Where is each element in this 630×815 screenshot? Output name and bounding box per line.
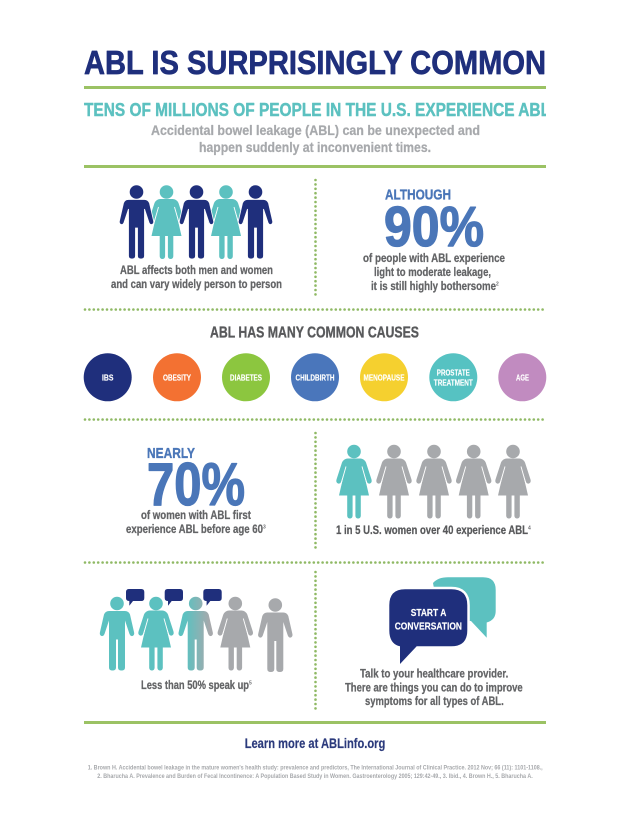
cause: age <box>498 353 546 401</box>
second green rule <box>84 165 546 168</box>
cause: IBS: IBS <box>102 372 114 382</box>
caption: talk to your provider <box>345 669 523 708</box>
cause: obesity <box>153 353 201 401</box>
caption: 90 percent: of people with ABL experience <box>363 253 505 265</box>
caption: talk to your provider: symptoms for all types of ABL. <box>365 696 504 708</box>
cause: IBS <box>84 353 132 401</box>
cause: diabetes <box>222 353 270 401</box>
cause: menopause: MENOPAUSE <box>364 372 405 382</box>
icon: row of men and women <box>119 185 273 259</box>
heading: causes: ABL HAS MANY COMMON CAUSES <box>210 324 419 342</box>
caption: men and women: and can vary widely person to person <box>111 279 282 291</box>
caption: talk to your provider: There are things you can do to improve <box>345 683 523 695</box>
icon: five women <box>336 445 531 518</box>
panel: start a conversation <box>345 577 523 708</box>
icon: speech bubbles: START A <box>411 608 446 619</box>
panel: speak up <box>100 589 293 692</box>
cause: diabetes: DIABETES <box>230 372 262 382</box>
subtitle: TENS OF MILLIONS OF PEOPLE IN THE U.S. EXPERIENCE ABL <box>84 99 550 120</box>
stat: 90%: 90% <box>384 195 484 259</box>
caption: 90 percent: 2 <box>496 282 499 288</box>
caption: speak up: Less than 50% speak up <box>141 680 249 692</box>
intro text: happen suddenly at inconvenient times. <box>199 140 431 155</box>
call to action: Learn more at ABLinfo.org <box>245 735 385 751</box>
cause: childbirth <box>291 353 339 401</box>
bottom green rule <box>84 721 546 724</box>
references <box>88 766 543 780</box>
cause: prostate treatment: PROSTATE <box>437 367 470 377</box>
caption: 1 in 5 women: 1 in 5 U.S. women over 40 experience ABL <box>336 525 528 537</box>
references: 2. Bharucha A. Prevalence and Burden of Fecal Incontinence: A Population Based Study in Women. Gastroenterology 2005; 129:42-49., 3. Ibid., 4. Brown H., 5. Bharucha A. <box>97 774 533 780</box>
caption: speak up: 5 <box>249 680 252 686</box>
cause: prostate treatment: TREATMENT <box>434 377 473 387</box>
label: nearly: NEARLY <box>147 446 195 462</box>
icon: five people with speech bubbles <box>100 589 293 672</box>
title: ABL IS SURPRISINGLY COMMON <box>84 45 546 82</box>
caption: 70 percent: 3 <box>263 524 266 530</box>
caption: talk to your provider: Talk to your healthcare provider. <box>360 669 508 681</box>
caption: 90 percent: it is still highly bothersome <box>371 281 496 293</box>
caption: 90 percent <box>363 253 505 293</box>
caption: 70 percent: experience ABL before age 60 <box>126 524 263 536</box>
cause: prostate treatment <box>429 353 477 401</box>
caption: 70 percent: of women with ABL first <box>141 510 251 522</box>
cause: childbirth: CHILDBIRTH <box>296 372 334 382</box>
intro text <box>151 123 480 155</box>
caption: 90 percent: light to moderate leakage, <box>374 267 491 279</box>
panel: men and women <box>111 185 282 291</box>
caption: 70 percent <box>126 510 266 536</box>
intro text: Accidental bowel leakage (ABL) can be unexpected and <box>151 123 480 138</box>
panel: causes <box>84 324 546 401</box>
caption: 1 in 5 women: 4 <box>528 526 531 532</box>
caption: men and women <box>111 265 282 291</box>
panel: 90 percent stat <box>363 188 505 293</box>
stat: 70%: 70% <box>147 451 245 518</box>
icon: speech bubbles: CONVERSATION <box>395 622 462 632</box>
panel: 1 in 5 women <box>336 445 531 537</box>
references: 1. Brown H. Accidental bowel leakage in the mature women's health study: prevalence and predictors, The International Journal of Clinical Practice. 2012 Nov; 66 (11): 1101-1108., <box>88 766 543 772</box>
cause: obesity: OBESITY <box>163 372 191 382</box>
label: although: ALTHOUGH <box>385 188 451 204</box>
cause: age: AGE <box>516 372 529 382</box>
icon: speech bubbles <box>389 577 496 664</box>
caption: men and women: ABL affects both men and women <box>120 265 273 277</box>
panel: 70 percent stat <box>126 446 266 536</box>
cause: menopause <box>360 353 408 401</box>
top green rule <box>84 86 546 89</box>
